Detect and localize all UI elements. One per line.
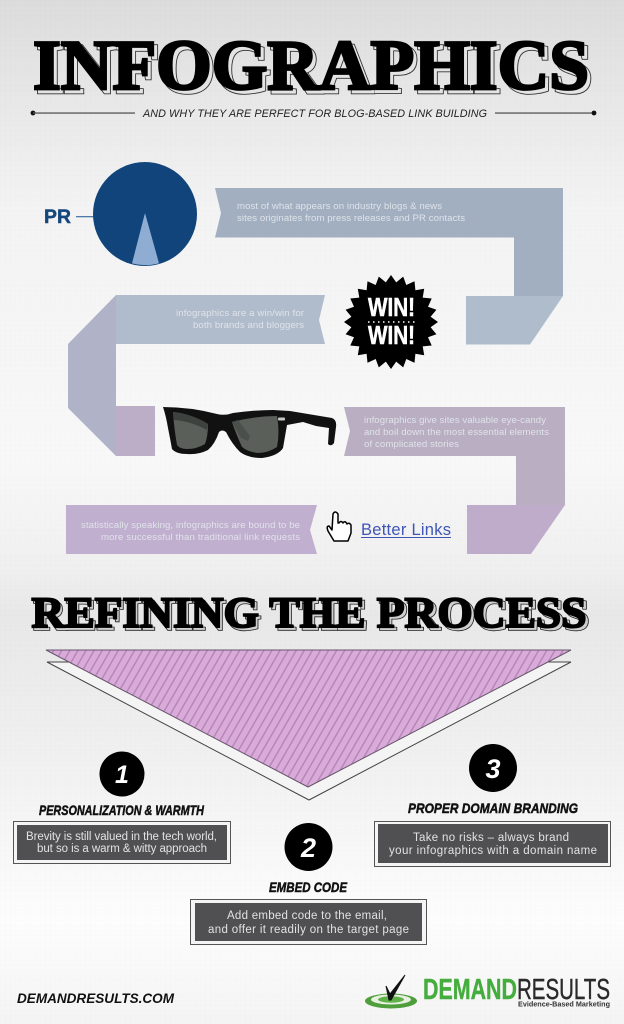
step 3: domain branding: your infographics with a domain name	[389, 845, 597, 857]
step 1: personalization: 1	[115, 761, 129, 789]
funnel triangle	[46, 650, 571, 800]
step 2: embed code: 2	[300, 833, 316, 863]
step 3: domain branding	[374, 744, 610, 866]
logo: Demand Results: DEMAND	[423, 974, 517, 1006]
ribbon 4: link requests	[66, 505, 317, 554]
ribbon 3: eye-candy	[344, 407, 565, 554]
icon: WIN WIN badge: WIN!	[368, 320, 415, 350]
ribbon 2: win/win: infographics are a win/win for	[176, 308, 305, 319]
step 1: personalization: PERSONALIZATION & WARMTH	[39, 802, 205, 818]
heading: REFINING THE PROCESS: REFINING THE PROCESS	[32, 590, 586, 637]
step 3: domain branding: 3	[485, 754, 501, 784]
ribbon 1: press releases: sites originates from press releases and PR contacts	[237, 213, 465, 224]
PR pie chart	[44, 162, 197, 266]
link: Better Links: Better Links	[361, 521, 451, 539]
PR pie chart: PR	[44, 206, 71, 228]
title: INFOGRAPHICS: INFOGRAPHICS	[36, 30, 592, 108]
subtitle with rule	[31, 108, 596, 120]
step 3: domain branding: Take no risks – always brand	[413, 832, 569, 844]
icon: WIN WIN badge: WIN!	[368, 292, 415, 322]
step 1: personalization: Brevity is still valued in the tech world,	[26, 831, 217, 843]
step 2: embed code	[190, 823, 426, 944]
ribbon 2: win/win: both brands and bloggers	[193, 320, 304, 331]
heading: REFINING THE PROCESS: REFINING THE PROCESS	[34, 592, 590, 640]
ribbon 1: press releases	[215, 188, 563, 344]
step 3: domain branding: PROPER DOMAIN BRANDING	[408, 800, 578, 816]
ribbon 4: link requests: statistically speaking, infographics are bound to be	[81, 520, 300, 531]
icon: sunglasses	[163, 407, 336, 458]
subtitle with rule: AND WHY THEY ARE PERFECT FOR BLOG-BASED LINK BUILDING	[142, 108, 487, 120]
logo: Demand Results: Evidence-Based Marketing	[518, 1000, 610, 1008]
footer url: DEMANDRESULTS.COM	[17, 991, 175, 1006]
tab joining ribbon 2 and sunglasses	[116, 406, 155, 456]
step 1: personalization: but so is a warm & witty approach	[37, 843, 207, 855]
title: INFOGRAPHICS: INFOGRAPHICS	[33, 27, 589, 105]
ribbon 2: win/win	[68, 295, 325, 456]
ribbon 3: eye-candy: infographics give sites valuable eye-candy	[364, 415, 546, 426]
ribbon 3: eye-candy: and boil down the most essential elements	[364, 427, 549, 438]
ribbon 3: eye-candy: of complicated stories	[364, 439, 459, 450]
logo: Demand Results	[365, 974, 610, 1008]
ribbon 4: link requests: more successful than traditional link requests	[101, 532, 300, 543]
icon: hand cursor	[327, 512, 351, 541]
step 2: embed code: and offer it readily on the target page	[208, 924, 409, 936]
step 2: embed code: EMBED CODE	[269, 879, 348, 895]
ribbon 1: press releases: most of what appears on industry blogs & news	[237, 201, 442, 212]
title: INFOGRAPHICS: INFOGRAPHICS	[36, 30, 592, 108]
icon: WIN WIN badge	[344, 275, 438, 369]
heading: REFINING THE PROCESS: REFINING THE PROCESS	[34, 592, 590, 640]
step 2: embed code: Add embed code to the email,	[227, 910, 387, 922]
step 1: personalization	[14, 752, 230, 864]
